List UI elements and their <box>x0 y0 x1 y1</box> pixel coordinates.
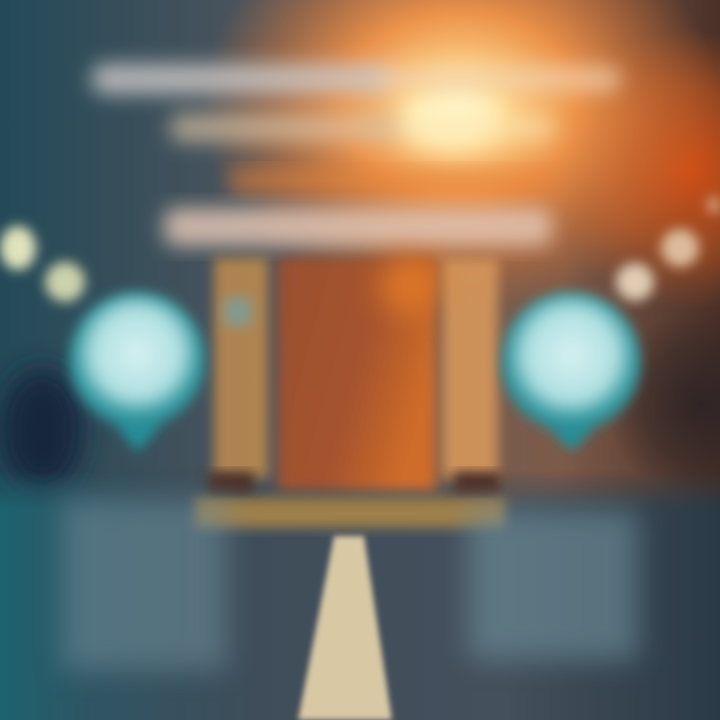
small marker near left pillar <box>224 297 252 327</box>
door frame: right pillar <box>442 258 498 478</box>
left light dots <box>0 226 85 302</box>
right light dots <box>616 197 720 301</box>
sun glow <box>200 0 720 310</box>
icon: right location pin <box>501 292 641 452</box>
icon: left location pin <box>69 292 205 452</box>
door <box>278 258 436 490</box>
door base <box>195 472 505 528</box>
subtitle text block <box>164 208 552 246</box>
road <box>0 460 720 720</box>
title text block <box>92 64 620 142</box>
left panel text block <box>62 500 227 670</box>
road centre line <box>298 536 392 720</box>
door frame: left pillar <box>214 258 268 478</box>
door top highlight <box>378 255 438 315</box>
right panel text block <box>468 510 638 660</box>
